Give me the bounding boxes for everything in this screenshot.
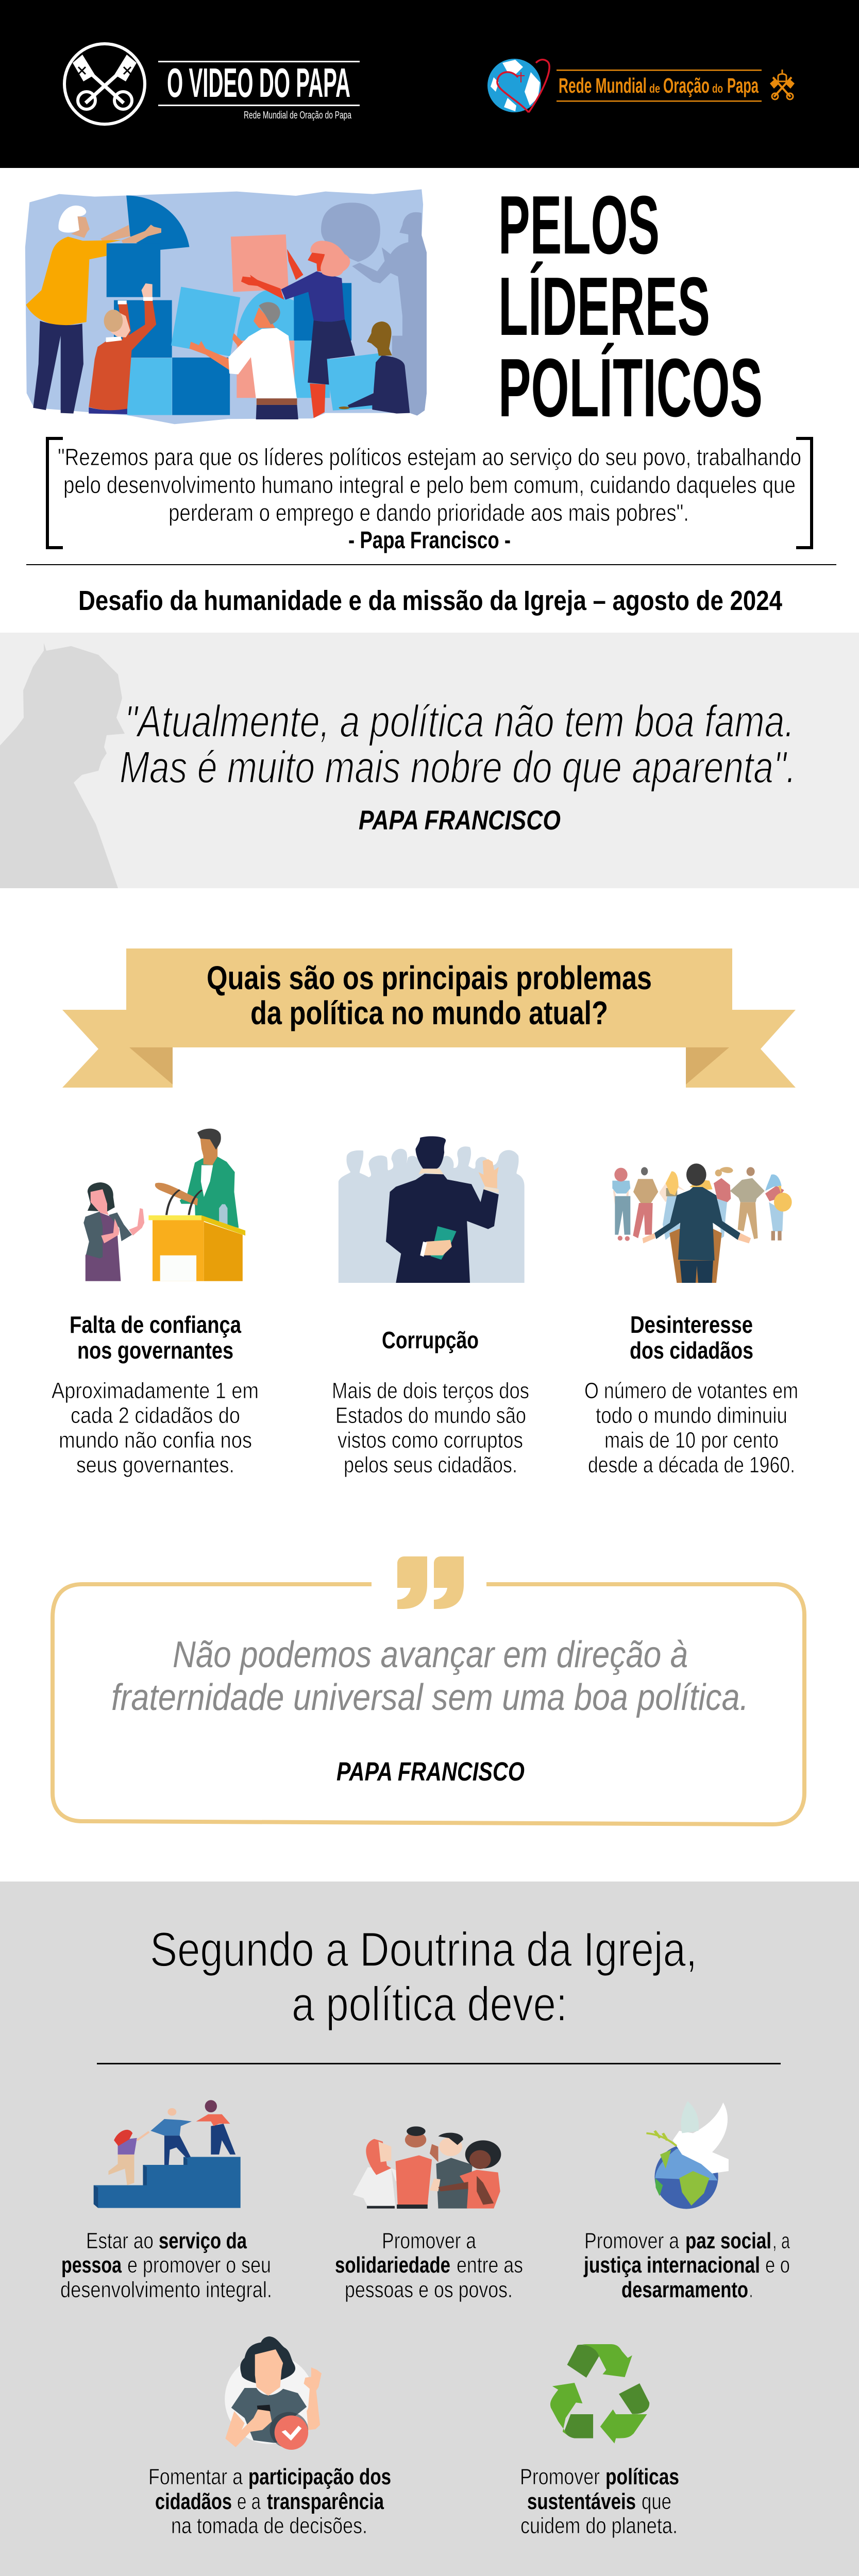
- column: lack of trust: cada 2 cidadãos do: [71, 1403, 240, 1428]
- prayer quote with brackets: [47, 438, 812, 553]
- logo: O Video do Papa emblem: [64, 44, 145, 124]
- column: corruption: Estados do mundo são: [335, 1403, 526, 1428]
- callout: quote box: fraternidade universal sem uma boa política.: [111, 1677, 749, 1718]
- column: lack of trust: nos governantes: [77, 1337, 233, 1364]
- logo: Rede Mundial wordmark: [557, 70, 762, 102]
- title: PELOS: [498, 179, 660, 272]
- prayer quote with brackets: - Papa Francisco -: [348, 527, 511, 553]
- column: corruption: [332, 1327, 529, 1478]
- doctrine point: solidarity: entre as: [457, 2252, 523, 2278]
- doctrine point: sustainable policies: políticas: [605, 2464, 679, 2489]
- doctrine point: service to the person: pessoa: [61, 2252, 122, 2278]
- column: citizen disinterest: O número de votantes em: [584, 1378, 798, 1403]
- heading: [150, 1922, 697, 2031]
- logo: Rede Mundial wordmark: de: [649, 82, 660, 96]
- icon: recycling arrows: [550, 2344, 649, 2444]
- icon: corrupt politician with money behind back: [339, 1137, 525, 1283]
- column: corruption: pelos seus cidadãos.: [344, 1452, 517, 1478]
- logo: globe and heart: [487, 59, 549, 112]
- column: citizen disinterest: todo o mundo diminuiu: [596, 1403, 787, 1428]
- doctrine point: service to the person: Estar ao: [86, 2228, 154, 2253]
- icon: diverse group of people: [353, 2126, 501, 2209]
- doctrine point: participation and transparency: cidadãos: [155, 2489, 232, 2514]
- callout: quote box: [53, 1556, 804, 1824]
- heading: Segundo a Doutrina da Igreja,: [150, 1922, 697, 1976]
- doctrine point: participation and transparency: [148, 2464, 391, 2538]
- doctrine point: service to the person: desenvolvimento integral.: [60, 2277, 272, 2302]
- doctrine point: solidarity: Promover a: [382, 2228, 476, 2253]
- header band: [0, 0, 859, 168]
- icon: dove over the globe: [646, 2101, 729, 2209]
- person in yellow: [26, 206, 161, 414]
- woman in blue: [241, 241, 355, 418]
- column: citizen disinterest: [584, 1311, 798, 1478]
- doctrine point: solidarity: pessoas e os povos.: [345, 2277, 513, 2302]
- doctrine point: solidarity: [335, 2228, 523, 2302]
- doctrine point: sustainable policies: sustentáveis: [527, 2489, 636, 2514]
- column: lack of trust: Aproximadamente 1 em: [52, 1378, 259, 1403]
- doctrine point: social peace: , a: [772, 2228, 790, 2253]
- heading: a política deve:: [292, 1977, 567, 2031]
- doctrine point: service to the person: [60, 2228, 272, 2302]
- ribbon heading: [62, 948, 796, 1088]
- doctrine point: social peace: desarmamento: [621, 2277, 748, 2302]
- icon: pope silhouette: [0, 643, 125, 888]
- doctrine point: solidarity: solidariedade: [335, 2252, 450, 2278]
- man in white shirt: [189, 302, 298, 419]
- icon: people climbing steps: [94, 2100, 241, 2208]
- title: LÍDERES: [498, 260, 710, 353]
- hero illustration: people assembling blocks: [25, 189, 427, 424]
- logo: Rede Mundial wordmark: Papa: [727, 74, 759, 97]
- doctrine point: sustainable policies: Promover: [520, 2464, 600, 2489]
- title: [498, 179, 763, 434]
- column: corruption: vistos como corruptos: [338, 1428, 523, 1453]
- doctrine point: participation and transparency: transparência: [267, 2489, 384, 2514]
- doctrine point: sustainable policies: que: [642, 2489, 671, 2514]
- icon: Vatican keys: [770, 70, 795, 99]
- doctrine point: social peace: Promover a: [584, 2228, 679, 2253]
- ribbon heading: da política no mundo atual?: [250, 994, 608, 1031]
- column: corruption: Mais de dois terços dos: [332, 1378, 529, 1403]
- column: lack of trust: Falta de confiança: [70, 1311, 241, 1338]
- doctrine point: participation and transparency: participação dos: [248, 2464, 391, 2489]
- column: citizen disinterest: Desinteresse: [630, 1311, 753, 1338]
- logo: Rede Mundial wordmark: Oração: [663, 74, 710, 97]
- ribbon heading: Quais são os principais problemas: [207, 959, 652, 996]
- doctrine point: social peace: justiça internacional: [583, 2252, 760, 2278]
- column: lack of trust: [52, 1311, 259, 1478]
- column: corruption: Corrupção: [382, 1327, 479, 1353]
- column: citizen disinterest: dos cidadãos: [630, 1337, 753, 1364]
- doctrine point: social peace: [583, 2228, 790, 2302]
- logo: Rede Mundial wordmark: do: [712, 82, 723, 96]
- doctrine point: social peace: e o: [765, 2252, 790, 2278]
- callout: quote box: PAPA FRANCISCO: [336, 1757, 525, 1786]
- doctrine point: social peace: paz social: [685, 2228, 771, 2253]
- column: lack of trust: mundo não confia nos: [59, 1428, 252, 1453]
- callout: quote box: Não podemos avançar em direção à: [173, 1634, 688, 1675]
- doctrine point: service to the person: e promover o seu: [127, 2252, 271, 2278]
- icon: woman with phone and check badge: [225, 2336, 322, 2450]
- doctrine point: sustainable policies: cuidem do planeta.: [520, 2513, 678, 2538]
- column: lack of trust: seus governantes.: [76, 1452, 234, 1478]
- doctrine point: social peace: .: [749, 2277, 753, 2302]
- icon: quotation marks: [397, 1556, 464, 1609]
- panel: pope quote on grey: PAPA FRANCISCO: [359, 805, 561, 836]
- logo: Rede Mundial wordmark: Rede Mundial: [559, 74, 647, 97]
- icon: leader before a crowd of citizens: [612, 1163, 792, 1283]
- doctrine point: participation and transparency: e a: [237, 2489, 261, 2514]
- person seated at right: [339, 321, 410, 414]
- doctrine point: sustainable policies: [520, 2464, 679, 2538]
- column: citizen disinterest: mais de 10 por cento: [604, 1428, 779, 1453]
- panel: doctrine of the Church: [0, 1882, 859, 2576]
- doctrine point: service to the person: serviço da: [159, 2228, 247, 2253]
- person in red sweater: [89, 283, 156, 414]
- logo wordmark: [158, 60, 360, 121]
- logo wordmark: Rede Mundial de Oração do Papa: [244, 110, 352, 121]
- column: citizen disinterest: desde a década de 1960.: [588, 1452, 795, 1478]
- logo wordmark: O VIDEO DO PAPA: [167, 60, 350, 106]
- panel: pope quote on grey: [0, 633, 859, 888]
- doctrine point: participation and transparency: Fomentar a: [148, 2464, 243, 2489]
- prayer quote with brackets: perderam o emprego e dando prioridade aos mais pobres".: [169, 499, 689, 526]
- icon: speaker at lectern and sceptical woman: [83, 1129, 245, 1281]
- doctrine point: participation and transparency: na tomada de decisões.: [171, 2513, 367, 2538]
